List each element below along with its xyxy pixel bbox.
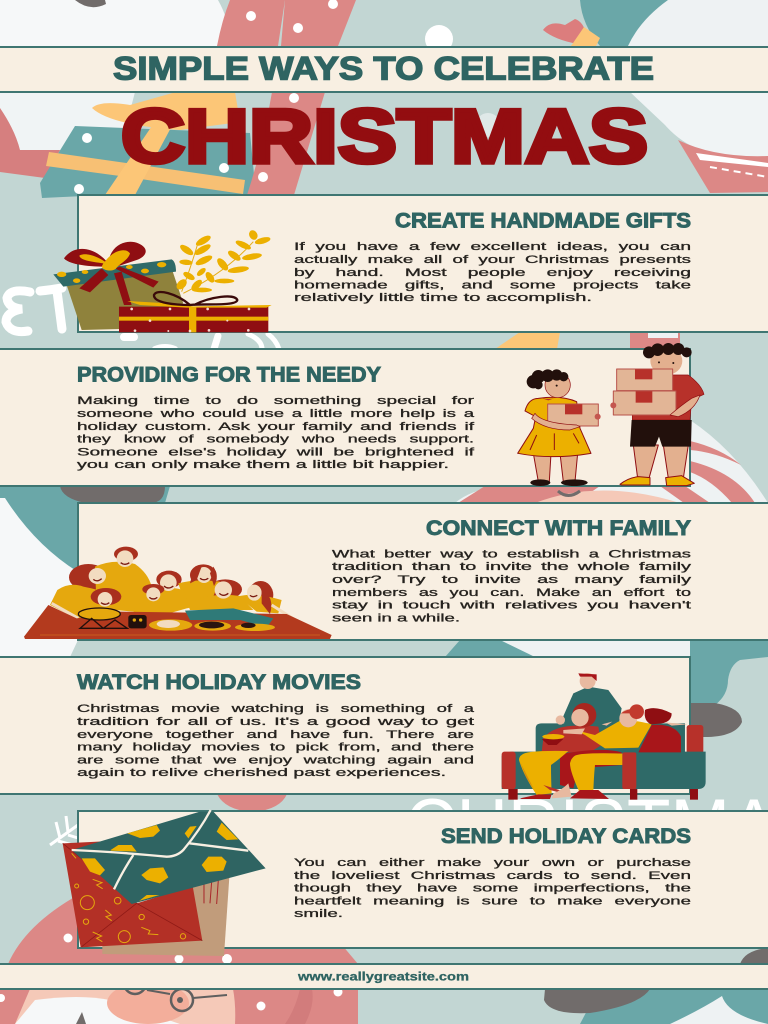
- text block: Making time to do something special for: [77, 395, 475, 407]
- text block: actually make all of your Christmas presents: [294, 254, 692, 266]
- text block: stay in touch with relatives you haven't: [332, 600, 691, 612]
- text block: [294, 241, 692, 304]
- main heading: CHRISTMAS: [121, 94, 648, 180]
- panel: watch holiday movies: [0, 657, 706, 800]
- text block: over? Try to invite as many family: [332, 574, 692, 586]
- text block: [77, 395, 476, 471]
- title band: [0, 47, 768, 92]
- text block: members as you can. Make an effort to: [332, 587, 691, 599]
- text block: by hand. Most people enjoy receiving: [294, 267, 691, 279]
- heading: CREATE HANDMADE GIFTS: [395, 208, 691, 232]
- text block: again to relive cherished past experiences.: [77, 767, 446, 779]
- snowflake: [50, 816, 78, 846]
- text block: [77, 703, 475, 779]
- text block: are some that we enjoy watching again and: [77, 754, 474, 766]
- text block: the loveliest Christmas cards to send. Even: [294, 870, 691, 882]
- panel: send holiday cards: [63, 810, 768, 956]
- text block: someone who could use a little more help is a: [77, 408, 475, 420]
- background lettering: [6, 288, 279, 349]
- text block: relatively little time to accomplish.: [294, 292, 592, 304]
- icon: envelope: [63, 810, 266, 956]
- title line: SIMPLE WAYS TO CELEBRATE: [113, 50, 654, 86]
- text block: Christmas movie watching is something of a: [77, 703, 475, 715]
- text block: homemade gifts, and some projects take: [294, 280, 691, 292]
- icon: gifts and leaves: [53, 229, 272, 332]
- heading: PROVIDING FOR THE NEEDY: [77, 362, 381, 386]
- text block: heartfelt meaning is sure to make everyone: [294, 896, 691, 908]
- panel: create handmade gifts: [53, 195, 768, 332]
- text block: tradition than to invite the whole family: [332, 561, 692, 573]
- heading: WATCH HOLIDAY MOVIES: [77, 670, 361, 694]
- text block: What better way to establish a Christmas: [332, 548, 692, 560]
- text block: Someone else's holiday will be brightened if: [77, 446, 476, 458]
- text block: many holiday movies to pick from, and there: [77, 742, 474, 754]
- text block: they know of somebody who needs support.: [77, 434, 474, 446]
- footer band: [0, 964, 768, 989]
- text block: smile.: [294, 908, 343, 920]
- website: www.reallygreatsite.com: [297, 970, 469, 984]
- text block: holiday custom. Ask your family and friends if: [77, 421, 476, 433]
- icon: family on a sofa: [502, 673, 706, 800]
- icon: children carrying boxes: [518, 343, 704, 486]
- text block: If you have a few excellent ideas, you can: [294, 241, 691, 253]
- heading: SEND HOLIDAY CARDS: [441, 824, 691, 848]
- text block: [294, 857, 691, 920]
- icon: family around a table: [24, 547, 332, 639]
- text block: You can either make your own or purchase: [294, 857, 691, 869]
- panel: connect with family: [24, 503, 768, 640]
- text block: [332, 548, 692, 624]
- panel: providing for the needy: [0, 343, 704, 486]
- text block: though they have some imperfections, the: [294, 882, 691, 894]
- text block: tradition for all of us. It's a good way to get: [77, 716, 474, 728]
- heading: CONNECT WITH FAMILY: [426, 516, 691, 540]
- text block: you can only make them a little bit happier.: [77, 459, 449, 471]
- text block: everyone together and have fun. There are: [77, 729, 474, 741]
- text block: seen in a while.: [332, 612, 460, 624]
